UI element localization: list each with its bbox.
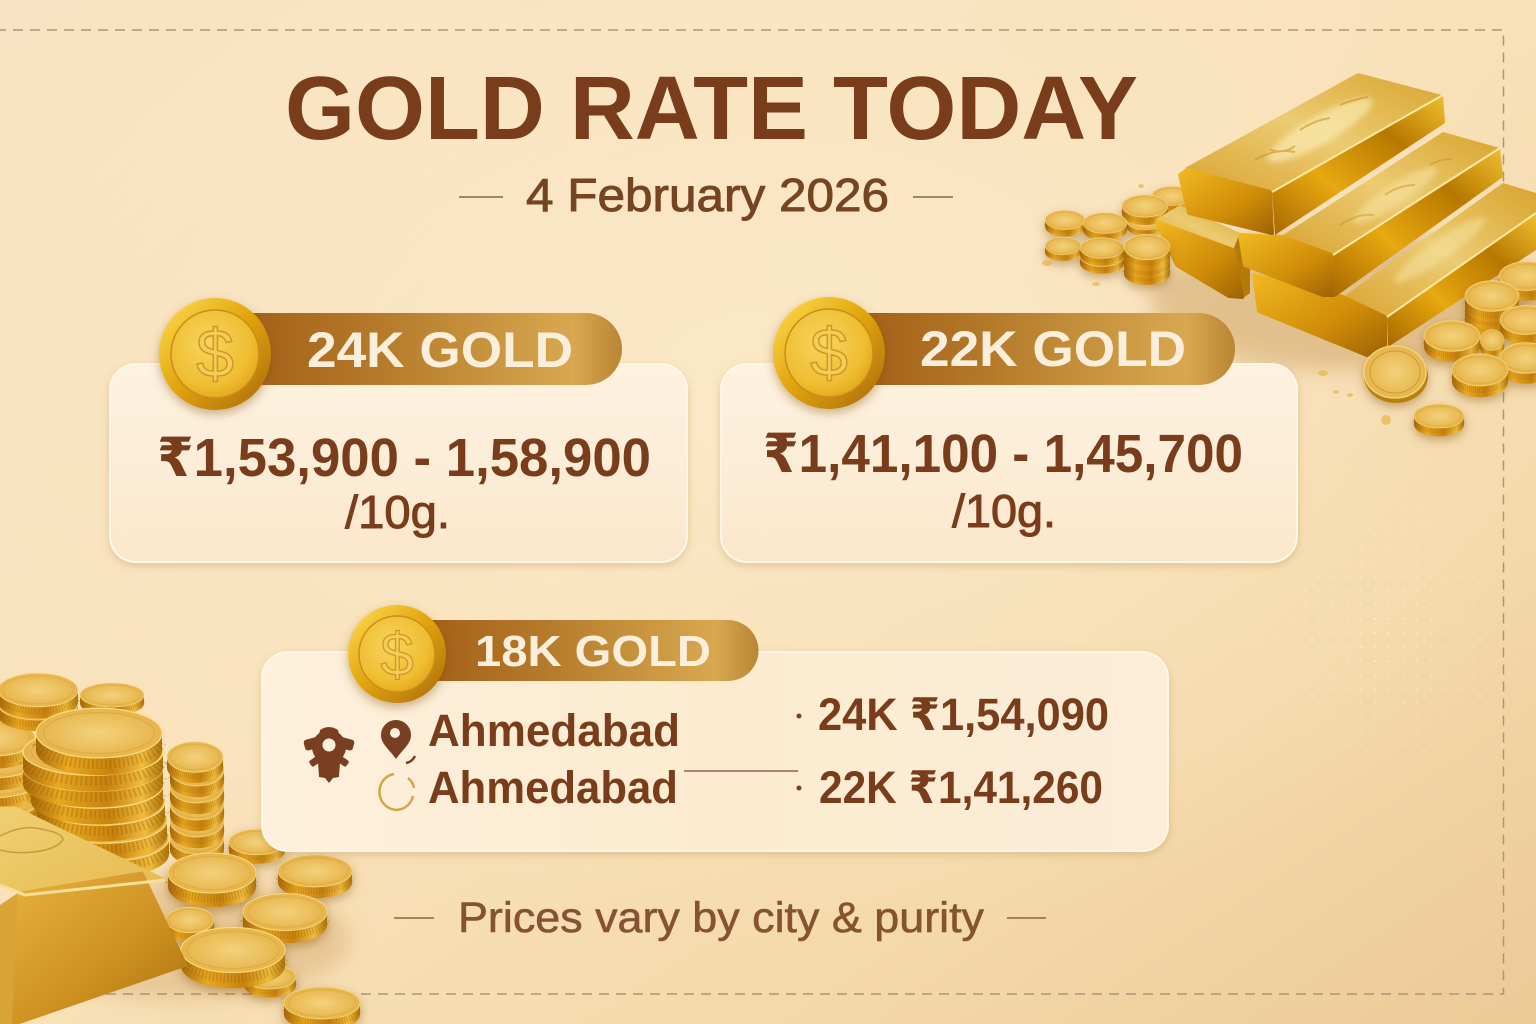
large gold bar [0,808,186,1024]
panel: 22K gold [721,297,1297,562]
gold bar middle [1240,132,1503,297]
illustration: gold bar and coins bottom left [0,673,360,1024]
big coin stack [23,708,169,877]
unit: 24K: /10g. [345,486,450,538]
city label 2: Ahmedabad [428,762,678,813]
gold bar lower left [1155,205,1250,299]
price: 24K: ₹1,53,900 - 1,58,900 [157,428,651,488]
panel: 24K gold [110,298,687,562]
city label 1: Ahmedabad [428,705,680,756]
icon: dollar coin 24K: $ [196,316,234,392]
panel: 18K gold and city rates [262,605,1168,851]
illustration: gold bars and coins top right [1042,73,1536,436]
unit: 22K: /10g. [952,485,1056,537]
icon: dollar coin 22K: $ [810,315,848,391]
coin face-on [1364,346,1428,403]
back coins [1045,186,1192,274]
back coin stacks [0,673,224,865]
title: GOLD RATE TODAY [285,59,1138,159]
pill header: 18K gold [400,620,758,681]
gold dust [1042,184,1391,425]
price: 22K: ₹1,41,100 - 1,45,700 [763,424,1243,484]
icon: dollar coin 18K: $ [380,621,414,688]
loose coins [166,829,360,1024]
pill header: 24K gold [215,313,622,385]
icon: coin ring [379,774,414,810]
rate: 22K city: 22K ₹1,41,260 [819,762,1103,813]
icon: dollar coin 24K [159,298,271,410]
front coins [1124,234,1536,436]
icon: location pin [381,720,415,763]
icon: gear [303,727,355,783]
gold bar bottom right [1254,183,1536,355]
icon: dollar coin 22K [773,297,885,409]
date subtitle: 4 February 2026 [526,169,889,221]
gold bar top [1180,73,1445,235]
icon: dollar coin 18K [348,605,446,703]
pill header: 18K gold: 18K GOLD [475,627,711,676]
pill header: 22K gold: 22K GOLD [920,321,1186,377]
pill header: 22K gold [830,313,1235,385]
footer note: Prices vary by city & purity [458,894,985,942]
pill header: 24K gold: 24K GOLD [307,322,573,378]
rate: 24K city: 24K ₹1,54,090 [818,689,1109,740]
